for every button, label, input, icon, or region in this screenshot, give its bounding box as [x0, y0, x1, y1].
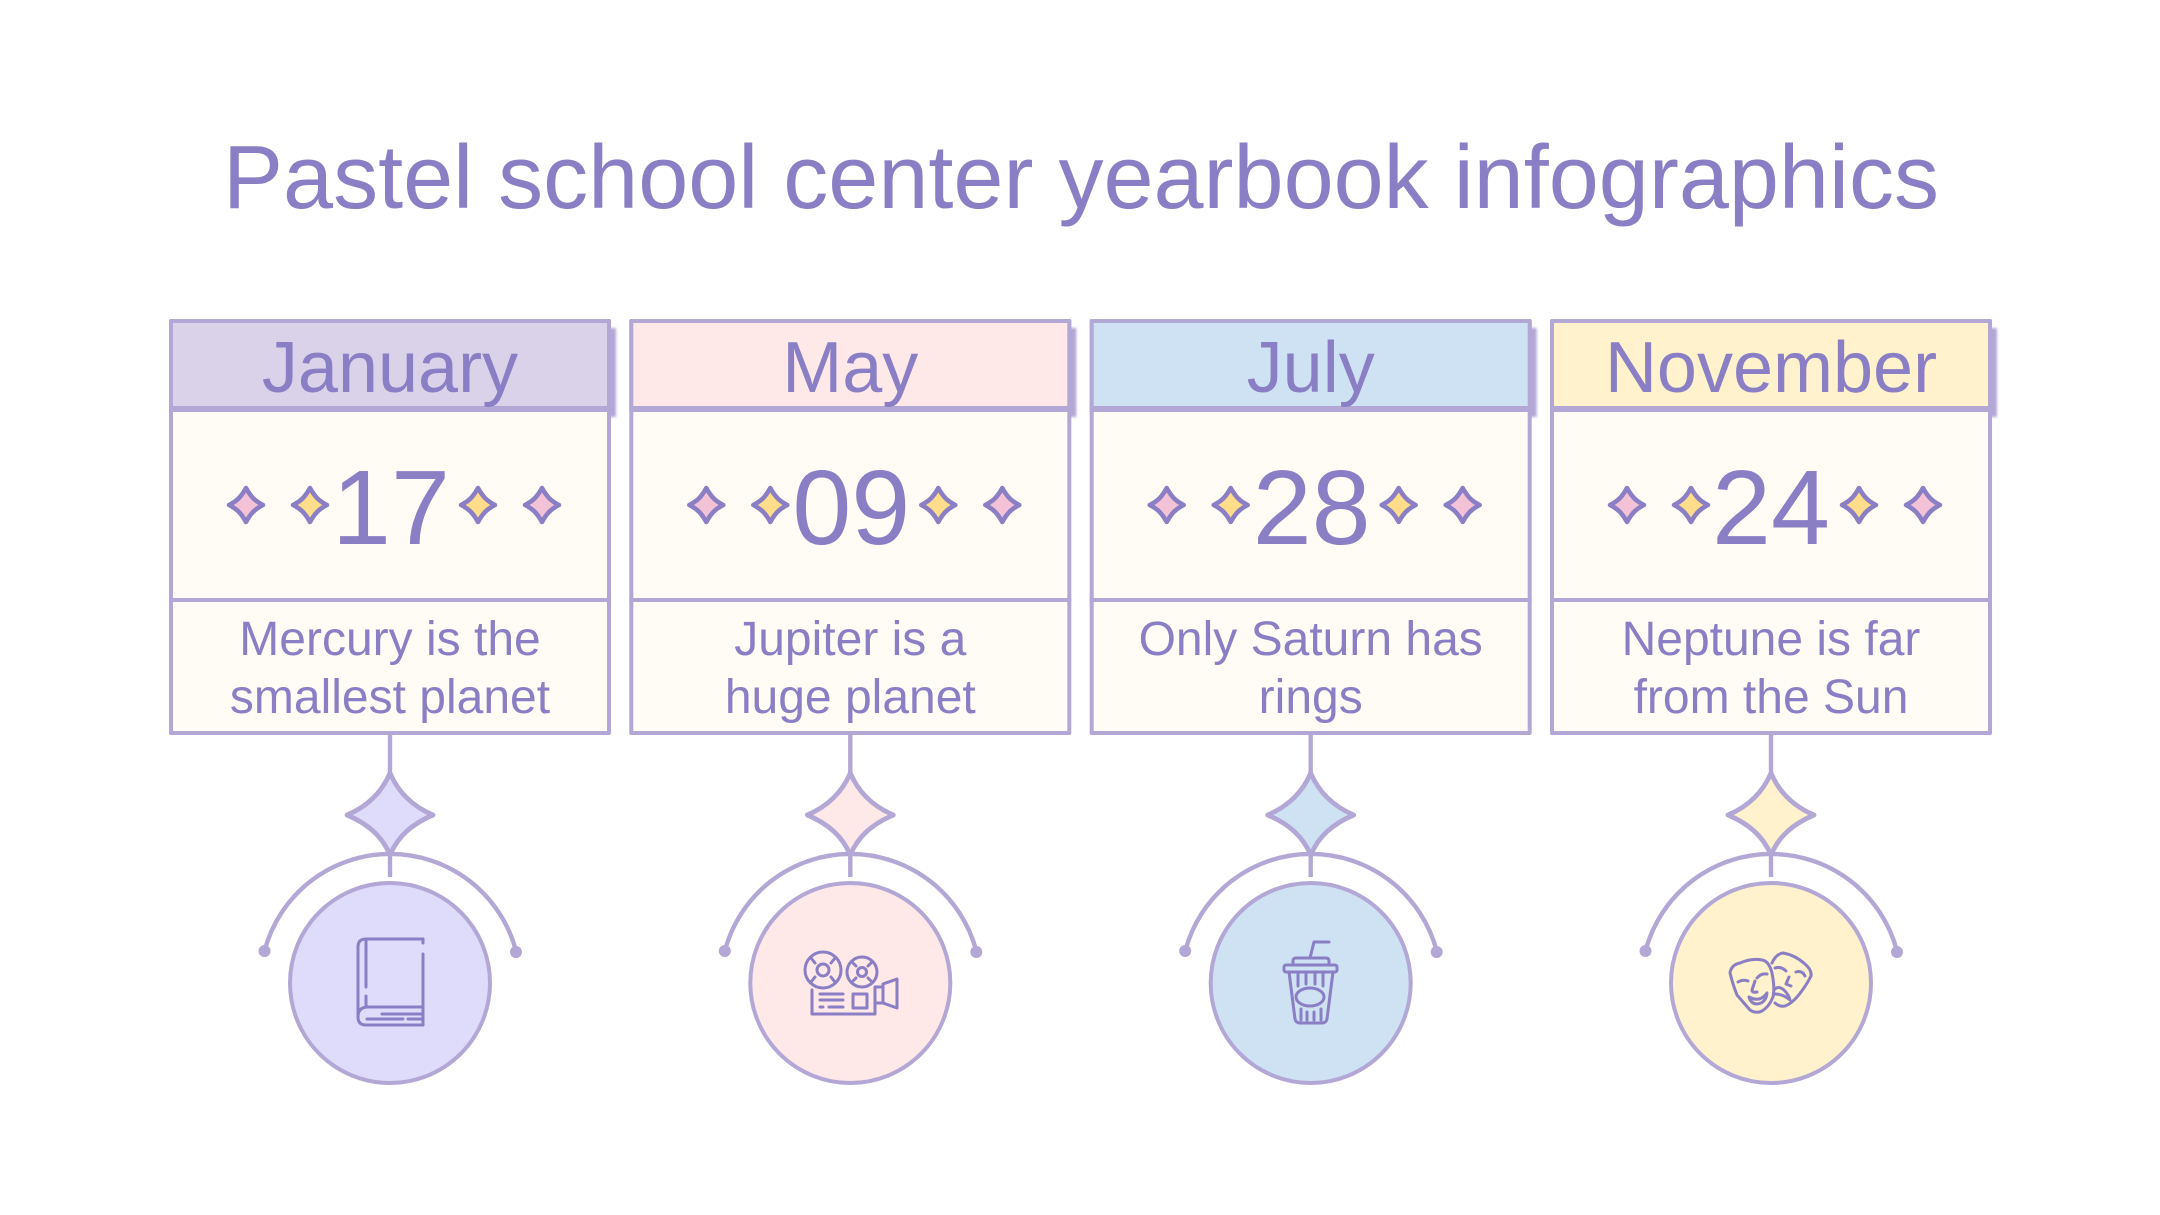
month header [631, 321, 1069, 409]
icon: drink cup [1284, 942, 1337, 1023]
title: Pastel school center yearbook infographics [223, 128, 1939, 228]
header rule [629, 406, 1071, 412]
header shadow [1561, 328, 1997, 417]
description: huge planet [725, 671, 976, 724]
card body [1552, 321, 1990, 733]
sparkle row [689, 488, 1019, 522]
description: Mercury is the [239, 613, 541, 666]
sparkle row [229, 488, 559, 522]
description: Only Saturn has [1139, 613, 1483, 666]
header rule [1090, 406, 1532, 412]
month label: January [262, 328, 518, 408]
row divider [1550, 598, 1992, 602]
row divider [169, 598, 611, 602]
icon circle [750, 883, 950, 1083]
header rule [169, 406, 611, 412]
card body [171, 321, 609, 733]
day number: 24 [1712, 449, 1830, 567]
panel: July [1090, 321, 1537, 1083]
description: smallest planet [230, 671, 550, 724]
connector with sparkle [1640, 735, 1903, 958]
card body [631, 321, 1069, 733]
panel: January [169, 321, 616, 1083]
connector with sparkle [1179, 735, 1443, 958]
description: Neptune is far [1622, 613, 1920, 666]
day number: 17 [332, 449, 450, 567]
header rule [1550, 406, 1992, 412]
month label: November [1605, 328, 1937, 408]
day number: 28 [1253, 449, 1371, 567]
icon: book [358, 939, 423, 1025]
month header [1092, 321, 1530, 409]
icon: film camera [805, 952, 897, 1014]
header shadow [1101, 328, 1537, 417]
panel: May [629, 321, 1076, 1083]
month header [1552, 321, 1990, 409]
description: Jupiter is a [734, 613, 967, 666]
row divider [1090, 598, 1532, 602]
icon circle [290, 883, 490, 1083]
icon circle [1211, 883, 1411, 1083]
month label: July [1247, 328, 1375, 408]
sparkle row [1610, 488, 1940, 522]
row divider [629, 598, 1071, 602]
connector with sparkle [719, 735, 982, 958]
description: from the Sun [1634, 671, 1908, 724]
icon circle [1671, 883, 1871, 1083]
sparkle row [1150, 488, 1480, 522]
panel: November [1550, 321, 1997, 1083]
icon: theatre masks [1730, 953, 1811, 1012]
day number: 09 [792, 449, 910, 567]
card body [1092, 321, 1530, 733]
connector with sparkle [258, 735, 522, 958]
month header [171, 321, 609, 409]
description: rings [1259, 671, 1363, 724]
header shadow [180, 328, 616, 417]
header shadow [640, 328, 1076, 417]
month label: May [782, 328, 918, 408]
